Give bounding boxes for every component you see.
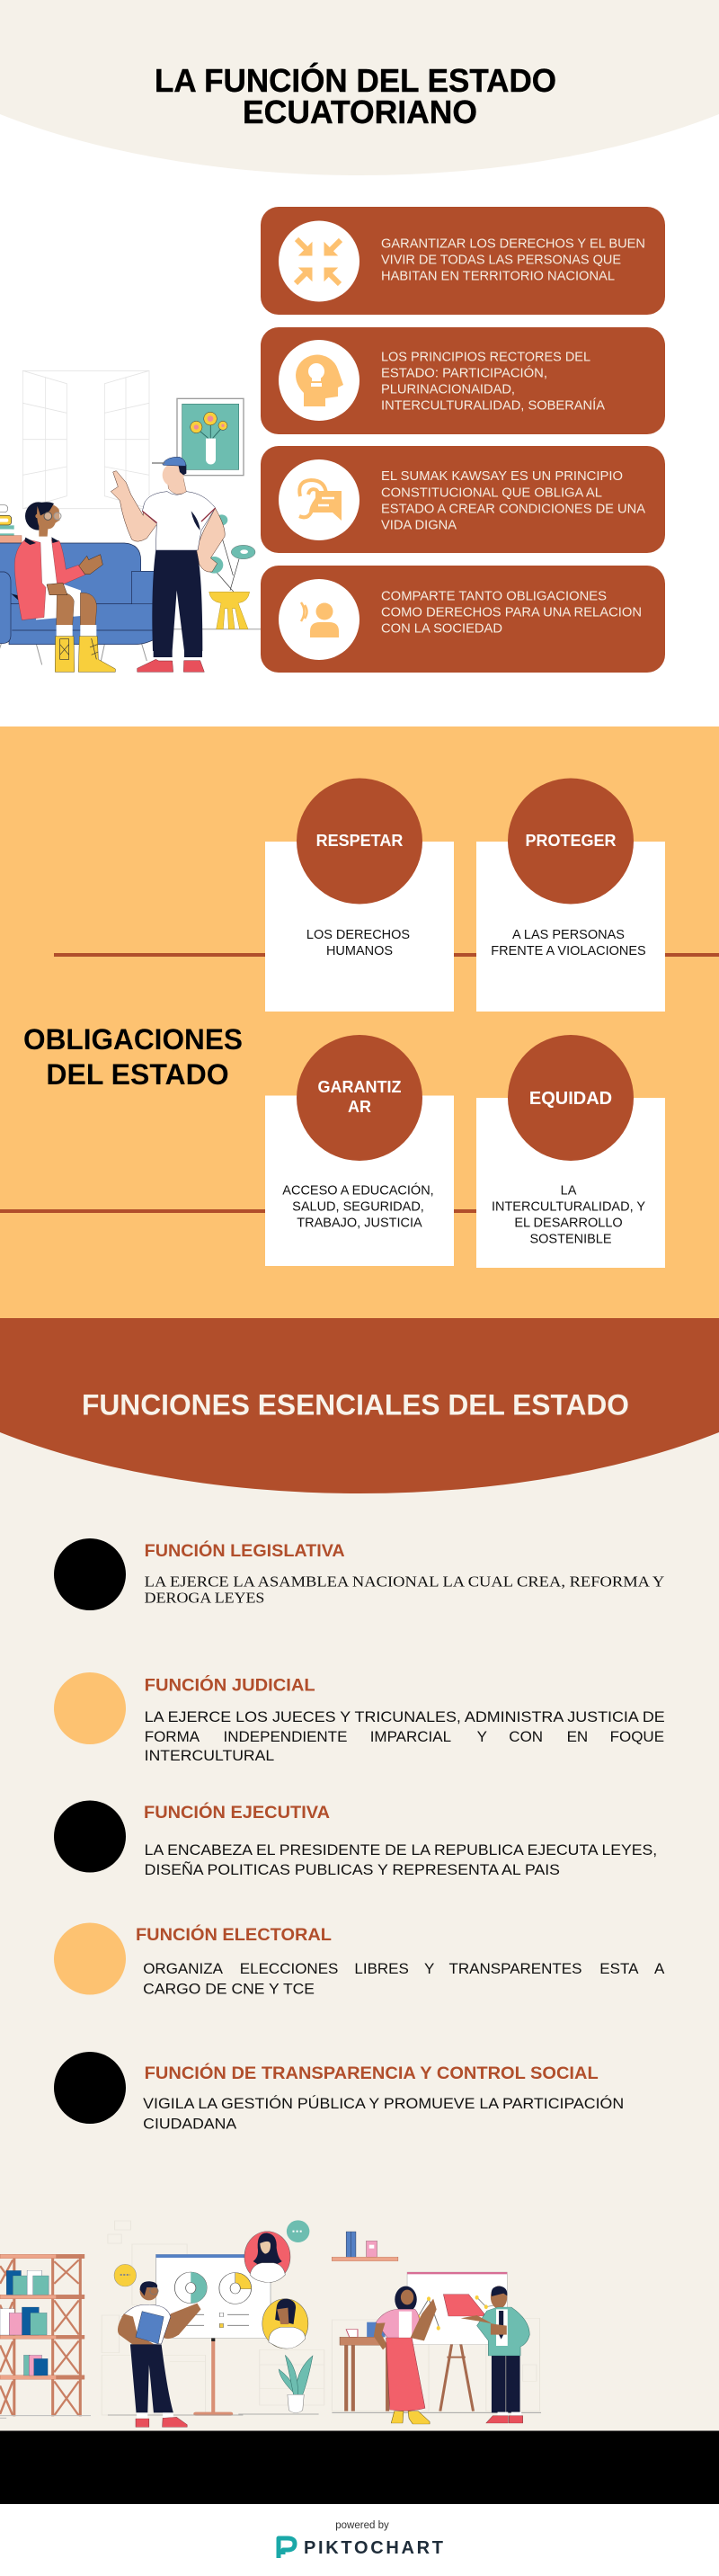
card text (381, 468, 645, 532)
card: respetar: RESPETAR (316, 832, 403, 850)
icon: ear and speech bubble (299, 480, 342, 521)
function: electoral: Y (424, 1960, 434, 1977)
card: proteger: PROTEGER (525, 832, 617, 850)
function: legislativa: LA EJERCE LA ASAMBLEA NACIONAL LA CUAL CREA, REFORMA Y (145, 1573, 664, 1590)
man with folder (118, 2281, 200, 2427)
card: proteger: FRENTE A VIOLACIONES (491, 944, 646, 958)
title (155, 61, 556, 130)
card: proteger: A LAS PERSONAS (512, 928, 625, 942)
section heading: funciones esenciales: FUNCIONES ESENCIALES DEL ESTADO (82, 1388, 629, 1421)
second board (407, 2272, 507, 2411)
card text (381, 236, 645, 284)
card text: COMO DERECHOS PARA UNA RELACION (381, 604, 642, 620)
plant and stool (173, 514, 261, 629)
function: judicial: INTERCULTURAL (145, 1747, 274, 1764)
function: ejecutiva: DISEÑA POLITICAS PUBLICAS Y REPRESENTA AL PAIS (145, 1861, 560, 1878)
desk (332, 2322, 541, 2412)
card text: CON LA SOCIEDAD (381, 620, 502, 637)
section heading: DEL ESTADO (46, 1058, 229, 1091)
illustration: office presentation (0, 2220, 541, 2427)
function: ejecutiva (54, 1800, 657, 1878)
card: respetar: LOS DERECHOS (306, 928, 410, 942)
function: transparencia y control social: VIGILA LA GESTIÓN PÚBLICA Y PROMUEVE LA PARTICIPACIÓN (143, 2095, 624, 2112)
function: judicial: FUNCIÓN JUDICIAL (145, 1674, 315, 1696)
card: principios (261, 327, 665, 434)
woman presenting (374, 2286, 437, 2424)
black band (0, 2431, 719, 2504)
speech bubbles and avatars (114, 2220, 309, 2349)
section heading: OBLIGACIONES (23, 1023, 243, 1056)
card: garantizar: AR (348, 1098, 371, 1116)
card: garantizar: ACCESO A EDUCACIÓN, (282, 1183, 434, 1198)
function: judicial (54, 1672, 665, 1764)
card: equidad: EQUIDAD (529, 1089, 612, 1109)
panel: funciones esenciales background (0, 1013, 719, 2431)
function: judicial: IMPARCIAL (370, 1728, 451, 1745)
function: ejecutiva: LA ENCABEZA EL PRESIDENTE DE LA REPUBLICA EJECUTA LEYES, (145, 1841, 657, 1858)
laptop (443, 2295, 484, 2316)
bookshelf (0, 2254, 91, 2416)
card: equidad: SOSTENIBLE (529, 1232, 612, 1246)
function: electoral: FUNCIÓN ELECTORAL (136, 1923, 332, 1945)
function: transparencia y control social: CIUDADANA (143, 2115, 237, 2133)
function: judicial: FORMA (145, 1728, 200, 1745)
title: LA FUNCIÓN DEL ESTADO (155, 61, 556, 99)
card: garantizar (265, 1035, 454, 1266)
function: electoral: CARGO DE CNE Y TCE (143, 1980, 315, 1998)
function: transparencia y control social: FUNCIÓN DE TRANSPARENCIA Y CONTROL SOCIAL (145, 2062, 599, 2083)
title: ECUATORIANO (243, 94, 477, 130)
card: equidad (476, 1035, 665, 1268)
function: judicial: CON (509, 1728, 543, 1745)
card text: INTERCULTURALIDAD, SOBERANÍA (381, 397, 605, 414)
function: electoral: TRANSPARENTES (449, 1960, 582, 1977)
card: garantizar: GARANTIZ (318, 1078, 401, 1096)
card: garantizar: TRABAJO, JUSTICIA (297, 1216, 422, 1230)
card: sumak kawsay (261, 446, 665, 553)
card: obligaciones y derechos (261, 566, 665, 673)
icon: speaking person (301, 602, 339, 637)
card: garantizar: SALUD, SEGURIDAD, (292, 1199, 424, 1214)
function: legislativa: FUNCIÓN LEGISLATIVA (145, 1539, 345, 1561)
potted plant (279, 2355, 313, 2413)
card text: ESTADO: PARTICIPACIÓN, (381, 365, 547, 381)
function: legislativa: DEROGA LEYES (145, 1590, 264, 1606)
card text: LOS PRINCIPIOS RECTORES DEL (381, 349, 590, 365)
function: judicial: FOQUE (610, 1728, 664, 1745)
card: respetar (265, 779, 454, 1012)
function: judicial: INDEPENDIENTE (223, 1728, 347, 1745)
card: respetar: HUMANOS (326, 944, 393, 958)
card text: VIVIR DE TODAS LAS PERSONAS QUE (381, 252, 621, 268)
card: equidad: INTERCULTURALIDAD, Y (492, 1199, 645, 1214)
card: derechos (261, 207, 665, 315)
function: electoral: ELECCIONES (240, 1960, 338, 1977)
man standing (111, 457, 225, 672)
wall painting (177, 398, 244, 476)
card: equidad: EL DESARROLLO (514, 1216, 623, 1230)
function: electoral: LIBRES (354, 1960, 409, 1977)
woman seated (14, 502, 115, 672)
card text: ESTADO A CREAR CONDICIONES DE UNA (381, 502, 645, 516)
card text: CONSTITUCIONAL QUE OBLIGA AL (381, 486, 602, 500)
card text (381, 588, 642, 637)
function: judicial: Y (477, 1728, 487, 1745)
function: legislativa (54, 1538, 664, 1610)
footer branding: PIKTOCHART (304, 2538, 443, 2558)
function: electoral: ORGANIZA (143, 1960, 224, 1977)
card text: PLURINACIONAIDAD, (381, 381, 515, 397)
footer branding (279, 2520, 443, 2558)
icon: head with light bulb (296, 355, 343, 406)
card: equidad: LA (561, 1183, 577, 1198)
function: ejecutiva: FUNCIÓN EJECUTIVA (144, 1801, 330, 1823)
footer branding: powered by (335, 2520, 389, 2531)
wall shelf (332, 2232, 398, 2261)
illustration: two people talking in a living room (0, 370, 261, 672)
icon: piktochart logo mark (279, 2538, 295, 2558)
icon: inward arrows (296, 239, 341, 284)
card text (381, 349, 605, 414)
card: proteger (476, 779, 665, 1012)
presentation board with charts (108, 2254, 319, 2416)
books (0, 505, 22, 543)
function: electoral (54, 1922, 665, 1998)
function: judicial: LA EJERCE LOS JUECES Y TRICUNALES, ADMINISTRA JUSTICIA DE (145, 1708, 665, 1725)
card text: COMPARTE TANTO OBLIGACIONES (381, 588, 607, 604)
sofa (0, 543, 159, 664)
card text: HABITAN EN TERRITORIO NACIONAL (381, 268, 615, 284)
card text: GARANTIZAR LOS DERECHOS Y EL BUEN (381, 236, 645, 252)
function: electoral: A (654, 1960, 665, 1977)
header panel (0, 0, 719, 175)
section heading (23, 1023, 243, 1091)
function: electoral: ESTA (599, 1960, 639, 1977)
function: judicial: EN (567, 1728, 588, 1745)
card text: VIDA DIGNA (381, 518, 457, 532)
panel: obligaciones del estado (0, 726, 719, 1318)
man in teal jacket (461, 2286, 529, 2423)
function: transparencia y control social (54, 2052, 624, 2133)
card text: EL SUMAK KAWSAY ES UN PRINCIPIO (381, 468, 623, 484)
